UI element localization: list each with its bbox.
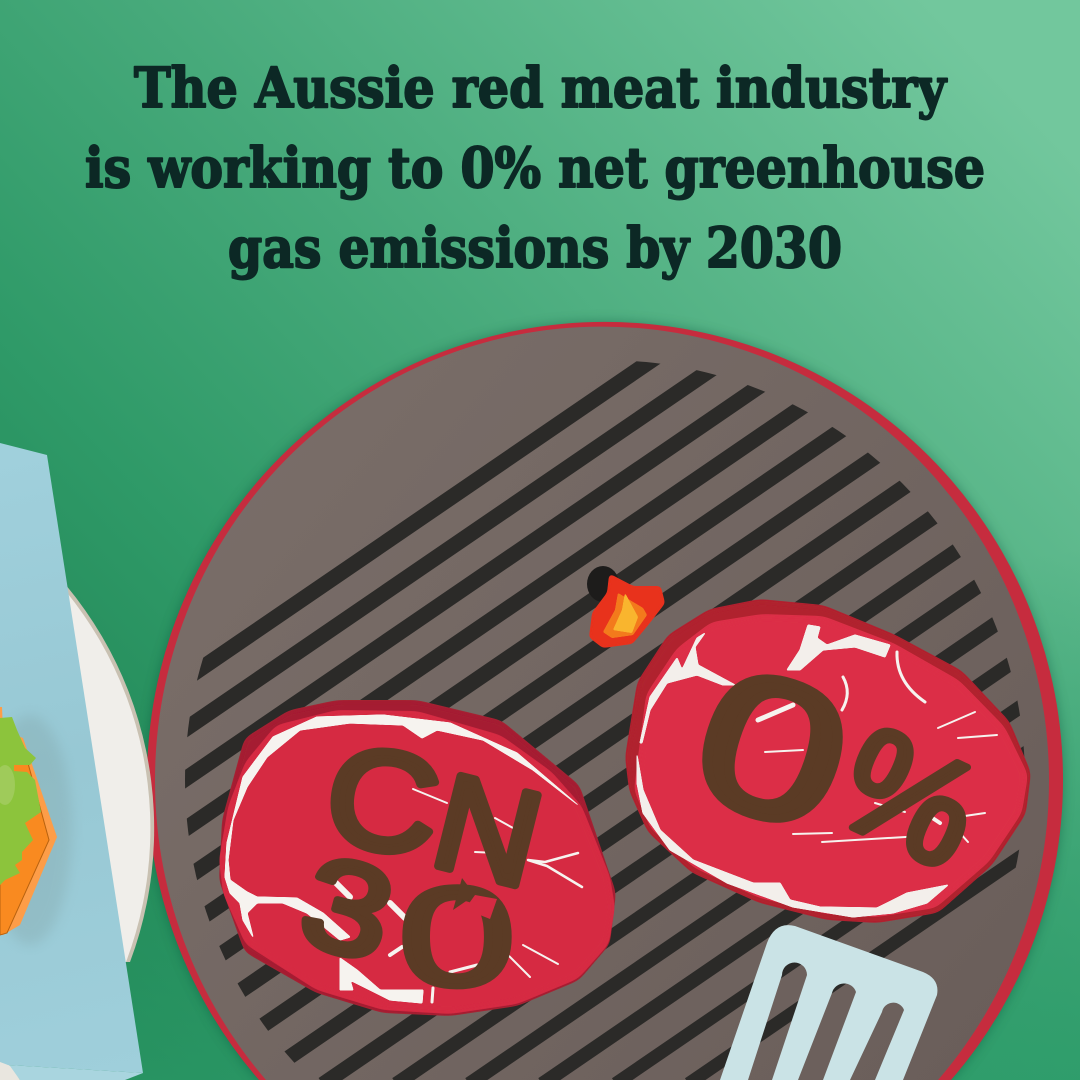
steak side layers: [222, 703, 613, 1013]
icon: light blue spatula: [720, 925, 937, 1080]
letters: 0%: [670, 622, 1006, 901]
fat marbling: [637, 625, 948, 917]
white plate behind paper: [0, 523, 154, 962]
letters: CN30: C: [317, 716, 449, 886]
steak face: [221, 712, 613, 1012]
letters: CN30: [287, 716, 556, 1015]
icon: orange hexagon with green foliage: [0, 707, 72, 945]
grill slots: [185, 361, 1024, 1080]
letters: CN30: N: [420, 746, 556, 916]
title: [85, 55, 985, 280]
arrow notch in the zero: [453, 878, 497, 919]
steak side layers: [628, 602, 1028, 920]
letters: 0%: 0: [670, 622, 875, 874]
grill: round paper plate with slots: [144, 317, 1068, 1080]
steak face: [636, 616, 1026, 915]
steak: 0%: [628, 602, 1028, 920]
title: is working to 0% net greenhouse: [85, 135, 985, 200]
steak: CN30: [221, 703, 613, 1015]
title: gas emissions by 2030: [228, 215, 842, 280]
letters: CN30: 0: [399, 858, 515, 1015]
title: The Aussie red meat industry: [134, 55, 948, 120]
blue paper card: [0, 443, 143, 1080]
letters: CN30: 3: [287, 827, 408, 990]
fat marbling: [225, 715, 578, 1003]
letters: 0%: %: [814, 693, 1006, 901]
icon: flame with black handle: [587, 566, 664, 647]
